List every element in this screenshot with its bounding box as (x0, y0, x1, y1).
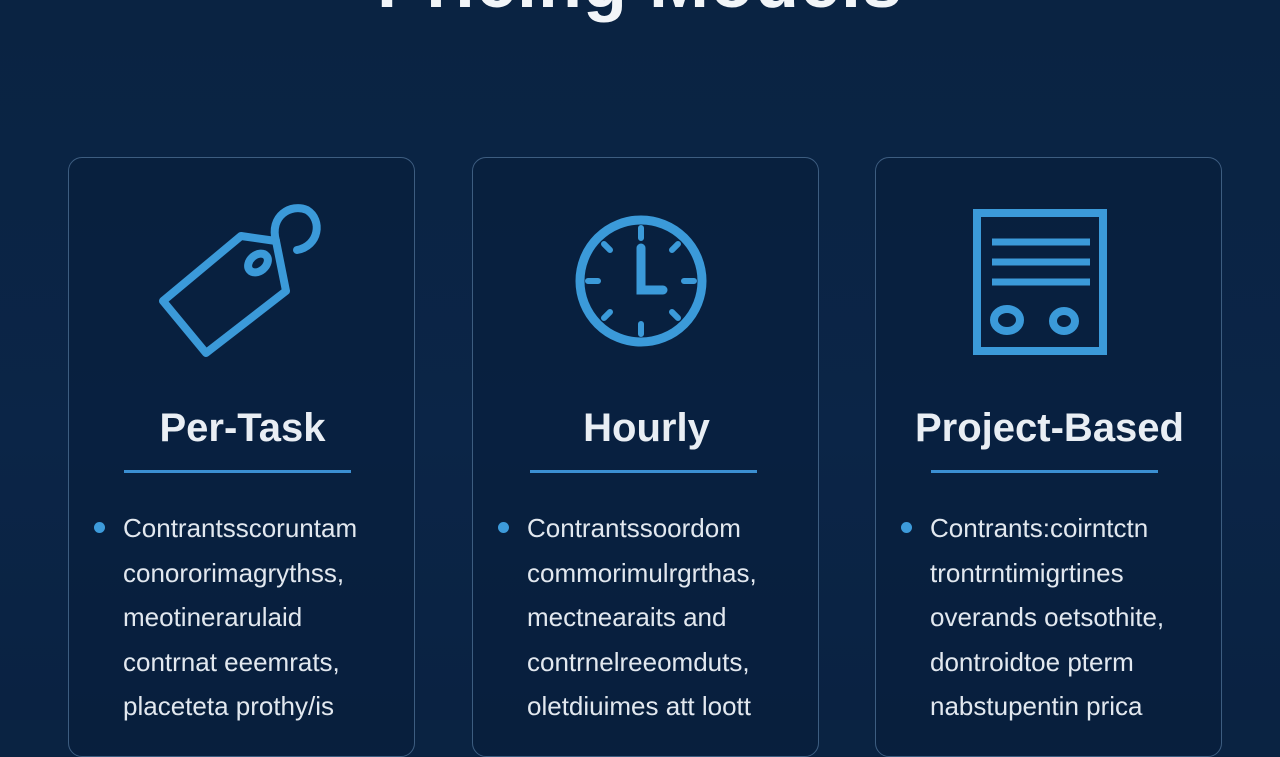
icon: price tag (159, 204, 321, 357)
bullet list: oletdiuimes att loott (527, 691, 751, 721)
bullet list: dontroidtoe pterm (930, 646, 1134, 676)
bullet list (94, 513, 357, 721)
bullet list: commorimulrgrthas, (527, 558, 757, 588)
heading: Project-Based (915, 406, 1184, 450)
bullet list (901, 513, 1164, 721)
bullet list: contrnat eeemrats, (123, 646, 340, 676)
heading: Hourly (583, 406, 710, 450)
bullet list: mectnearaits and (527, 602, 726, 632)
icon: document (973, 209, 1107, 355)
bullet list: Contrantssoordom (527, 513, 741, 543)
bullet list: nabstupentin prica (930, 691, 1142, 721)
icon: clock (576, 216, 706, 346)
bullet list: trontrntimigrtines (930, 558, 1124, 588)
bullet list (498, 513, 757, 721)
bullet list: placeteta prothy/is (123, 691, 334, 721)
bullet list: overands oetsothite, (930, 602, 1164, 632)
bullet list: meotinerarulaid (123, 602, 302, 632)
bullet list: conororimagrythss, (123, 558, 344, 588)
heading: Per-Task (159, 406, 326, 450)
panel: hourly (472, 157, 819, 757)
panel: per-task (68, 157, 415, 757)
panel: project-based (875, 157, 1222, 757)
bullet list: contrnelreeomduts, (527, 646, 750, 676)
bullet list: Contrants:coirntctn (930, 513, 1148, 543)
bullet list: Contrantsscoruntam (123, 513, 357, 543)
